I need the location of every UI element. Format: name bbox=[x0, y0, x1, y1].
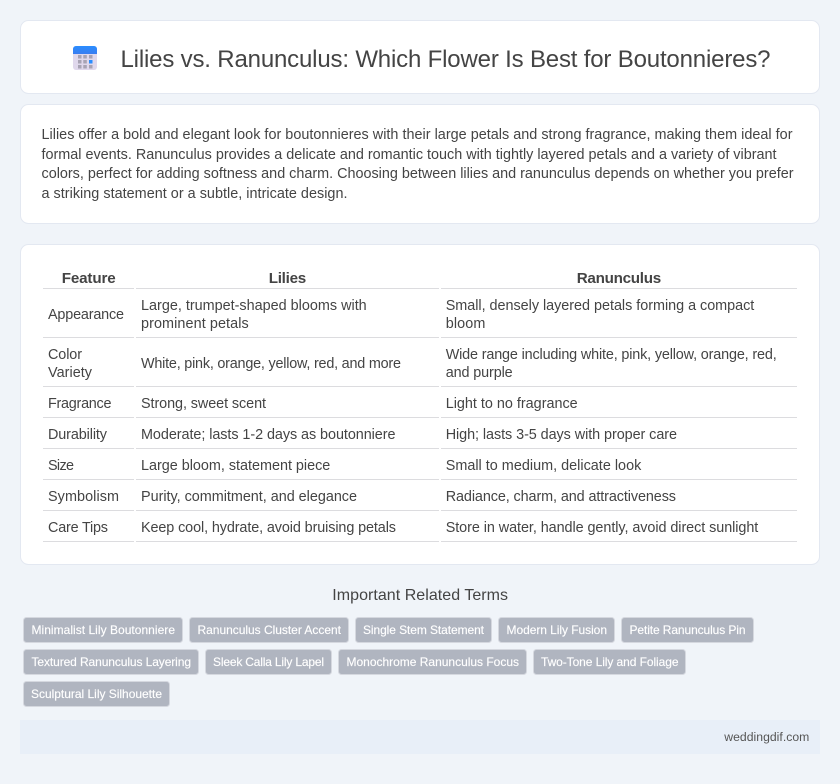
tag: Sleek Calla Lily Lapel bbox=[213, 655, 324, 669]
table row: appearance: bloom bbox=[446, 316, 485, 332]
table row: color variety: and purple bbox=[446, 365, 513, 381]
tag: Monochrome Ranunculus Focus bbox=[346, 655, 519, 669]
table row: fragrance: Light to no fragrance bbox=[446, 396, 578, 412]
text block: introduction: formal events. Ranunculus provides a delicate and romantic touch with tightly layered petals and a variety of vibrant bbox=[42, 147, 776, 163]
table row: symbolism: Symbolism bbox=[48, 489, 119, 505]
tag bbox=[534, 650, 686, 674]
table row: fragrance: Strong, sweet scent bbox=[141, 396, 266, 412]
text block: introduction: a striking statement or a subtle, intricate design. bbox=[42, 186, 348, 202]
table row: appearance bbox=[43, 298, 797, 338]
table row: appearance: prominent petals bbox=[141, 316, 249, 332]
tag: Textured Ranunculus Layering bbox=[32, 655, 191, 669]
panel: comparison table bbox=[20, 244, 820, 564]
table row: durability: High; lasts 3-5 days with proper care bbox=[446, 427, 677, 443]
tag: Minimalist Lily Boutonniere bbox=[32, 623, 175, 637]
table row: appearance: Small, densely layered petals forming a compact bbox=[446, 298, 754, 314]
tag: Two-Tone Lily and Foliage bbox=[541, 655, 679, 669]
table row: size: Small to medium, delicate look bbox=[446, 458, 642, 474]
text block: introduction bbox=[42, 127, 794, 202]
table row: care tips: Store in water, handle gently, avoid direct sunlight bbox=[446, 520, 758, 536]
table row: size: Large bloom, statement piece bbox=[141, 458, 330, 474]
table row: fragrance: Fragrance bbox=[48, 396, 112, 412]
tag: Sculptural Lily Silhouette bbox=[31, 687, 162, 701]
table row: symbolism: Purity, commitment, and elegance bbox=[141, 489, 357, 505]
tag bbox=[24, 682, 170, 706]
table row: appearance: Large, trumpet-shaped blooms with bbox=[141, 298, 367, 314]
tag bbox=[622, 618, 754, 642]
icon: calendar bbox=[73, 46, 97, 70]
table row: symbolism bbox=[43, 489, 797, 511]
heading: important related terms: Important Related Terms bbox=[332, 587, 508, 604]
tag: Single Stem Statement bbox=[363, 623, 485, 637]
tag: Petite Ranunculus Pin bbox=[630, 623, 746, 637]
tag bbox=[24, 650, 198, 674]
text block: introduction: colors, perfect for adding softness and charm. Choosing between lilies and ranunculus depends on whether you prefer bbox=[42, 166, 794, 182]
tag bbox=[338, 650, 526, 674]
table row: symbolism: Radiance, charm, and attractiveness bbox=[446, 489, 676, 505]
table row: color variety: Wide range including white, pink, yellow, orange, red, bbox=[446, 347, 777, 363]
table row: care tips: Keep cool, hydrate, avoid bruising petals bbox=[141, 520, 396, 536]
table row: color variety: White, pink, orange, yellow, red, and more bbox=[141, 356, 401, 372]
tag: Modern Lily Fusion bbox=[506, 623, 607, 637]
tag: Ranunculus Cluster Accent bbox=[198, 623, 342, 637]
table header row bbox=[43, 270, 797, 289]
table row: durability bbox=[43, 427, 797, 449]
table row: color variety: Variety bbox=[48, 365, 93, 381]
tag bbox=[206, 650, 332, 674]
panel: header bbox=[20, 20, 820, 94]
table row: appearance: Appearance bbox=[48, 307, 124, 323]
title: Lilies vs. Ranunculus: Which Flower Is Best for Boutonnieres? bbox=[120, 46, 770, 73]
table header row: Lilies bbox=[269, 270, 306, 287]
table row: color variety: Color bbox=[48, 347, 82, 363]
table row: color variety bbox=[43, 347, 797, 387]
tag bbox=[498, 618, 614, 642]
table header row: Feature bbox=[62, 270, 116, 287]
text block: introduction: Lilies offer a bold and elegant look for boutonnieres with their large petals and strong fragrance, making them ideal for bbox=[42, 127, 793, 143]
table row: size bbox=[43, 458, 797, 480]
table row: care tips bbox=[43, 520, 797, 542]
table row: fragrance bbox=[43, 396, 797, 418]
table row: care tips: Care Tips bbox=[48, 520, 108, 536]
table row: size: Size bbox=[48, 458, 74, 474]
footer bbox=[20, 720, 820, 754]
tag bbox=[24, 618, 182, 642]
table row: durability: Durability bbox=[48, 427, 108, 443]
panel: related term tags bbox=[24, 618, 754, 706]
table header row: Ranunculus bbox=[577, 270, 661, 287]
tag bbox=[356, 618, 492, 642]
footer: weddingdif.com bbox=[723, 730, 809, 744]
panel: introduction text bbox=[20, 104, 820, 224]
table row: durability: Moderate; lasts 1-2 days as boutonniere bbox=[141, 427, 396, 443]
tag bbox=[190, 618, 348, 642]
